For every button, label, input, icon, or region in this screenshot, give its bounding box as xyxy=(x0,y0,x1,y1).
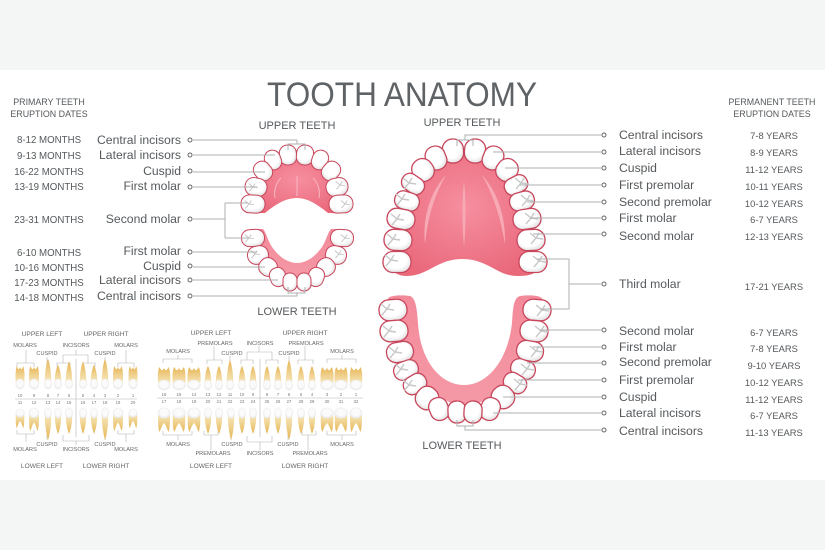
primary teeth chart: CUSPID xyxy=(36,442,58,448)
permanent teeth chart: CUSPID xyxy=(221,442,243,448)
permanent teeth chart: 17 xyxy=(162,399,167,404)
primary teeth chart: UPPER LEFT xyxy=(22,331,62,338)
permanent teeth eruption dates: PERMANENT TEETH xyxy=(729,97,815,107)
permanent teeth labels: Central incisors xyxy=(619,128,703,142)
primary arch leader lines xyxy=(188,138,305,298)
primary teeth chart: LOWER RIGHT xyxy=(83,463,129,470)
permanent teeth eruption dates: 10-11 YEARS xyxy=(745,181,803,192)
permanent teeth chart: MOLARS xyxy=(330,442,354,448)
permanent teeth chart: MOLARS xyxy=(166,442,190,448)
primary teeth eruption dates: 16-22 MONTHS xyxy=(14,167,84,178)
permanent teeth chart: 3 xyxy=(326,392,329,397)
permanent arch leader lines xyxy=(457,133,606,432)
primary teeth labels: Lateral incisors xyxy=(99,148,181,162)
primary teeth chart: 19 xyxy=(116,400,121,405)
permanent teeth labels: First premolar xyxy=(619,373,694,387)
permanent teeth chart: INCISORS xyxy=(246,451,274,457)
permanent teeth labels: Third molar xyxy=(619,277,681,291)
permanent teeth chart: 24 xyxy=(251,399,256,404)
primary teeth chart: MOLARS xyxy=(13,343,37,349)
permanent teeth eruption dates: 11-13 YEARS xyxy=(745,427,803,438)
large lower arch xyxy=(378,295,552,423)
permanent teeth eruption dates: 10-12 YEARS xyxy=(745,377,803,388)
primary teeth eruption dates: 14-18 MONTHS xyxy=(14,293,84,304)
permanent teeth chart: 6 xyxy=(288,392,291,397)
permanent teeth chart: 8 xyxy=(266,392,269,397)
permanent teeth labels: Second molar xyxy=(619,324,694,338)
primary teeth chart: 17 xyxy=(92,400,97,405)
permanent teeth chart: 11 xyxy=(228,392,233,397)
permanent teeth chart: 29 xyxy=(310,399,315,404)
permanent teeth eruption dates: 8-9 YEARS xyxy=(750,147,798,158)
permanent teeth chart: MOLARS xyxy=(330,349,354,355)
primary teeth chart: CUSPID xyxy=(94,351,116,357)
primary teeth eruption dates: 23-31 MONTHS xyxy=(14,215,84,226)
permanent teeth chart: PREMOLARS xyxy=(195,451,231,457)
heading: small upper teeth: UPPER TEETH xyxy=(259,120,335,132)
primary teeth chart: MOLARS xyxy=(114,343,138,349)
white panel xyxy=(0,70,825,480)
primary teeth chart: LOWER LEFT xyxy=(21,463,63,470)
title: TOOTH ANATOMY xyxy=(267,76,537,114)
primary teeth chart: 1 xyxy=(132,393,135,398)
permanent teeth labels: Lateral incisors xyxy=(619,406,701,420)
primary teeth chart: 10 xyxy=(18,393,23,398)
permanent teeth chart: CUSPID xyxy=(278,351,300,357)
permanent teeth eruption dates: 6-7 YEARS xyxy=(750,327,798,338)
primary teeth chart: 20 xyxy=(131,400,136,405)
primary teeth chart: 6 xyxy=(68,393,71,398)
permanent teeth labels: Cuspid xyxy=(619,390,657,404)
primary teeth chart: 7 xyxy=(57,393,60,398)
permanent teeth chart: 22 xyxy=(228,399,233,404)
primary teeth labels: Second molar xyxy=(106,212,181,226)
permanent teeth chart: INCISORS xyxy=(246,341,274,347)
primary teeth chart: 18 xyxy=(103,400,108,405)
permanent teeth eruption dates: 9-10 YEARS xyxy=(748,360,800,371)
primary teeth chart xyxy=(13,331,138,470)
permanent teeth chart: 16 xyxy=(162,392,167,397)
primary teeth eruption dates: 13-19 MONTHS xyxy=(14,182,84,193)
permanent teeth chart: 4 xyxy=(311,392,314,397)
permanent teeth chart: UPPER RIGHT xyxy=(282,330,328,337)
primary teeth chart: MOLARS xyxy=(13,447,37,453)
permanent teeth labels: First molar xyxy=(619,340,677,354)
primary teeth chart: 3 xyxy=(104,393,107,398)
permanent teeth eruption dates: 7-8 YEARS xyxy=(750,130,798,141)
primary teeth chart: 11 xyxy=(18,400,23,405)
permanent teeth chart: 25 xyxy=(265,399,270,404)
permanent teeth chart xyxy=(157,330,363,470)
primary teeth labels: First molar xyxy=(123,179,181,193)
primary teeth eruption dates: 17-23 MONTHS xyxy=(14,278,84,289)
primary teeth chart: INCISORS xyxy=(62,343,90,349)
heading: small lower teeth: LOWER TEETH xyxy=(257,306,337,318)
permanent teeth chart: MOLARS xyxy=(166,349,190,355)
permanent teeth chart: 2 xyxy=(340,392,343,397)
permanent teeth labels: Cuspid xyxy=(619,161,657,175)
permanent teeth labels: Second premolar xyxy=(619,195,712,209)
primary teeth labels: Cuspid xyxy=(143,164,181,178)
heading: large lower teeth: LOWER TEETH xyxy=(422,440,502,452)
permanent teeth eruption dates: 11-12 YEARS xyxy=(745,164,803,175)
permanent teeth eruption dates: 7-8 YEARS xyxy=(750,343,798,354)
permanent teeth chart: 12 xyxy=(217,392,222,397)
permanent teeth labels: First premolar xyxy=(619,178,694,192)
permanent teeth chart: 21 xyxy=(217,399,222,404)
permanent teeth chart: 31 xyxy=(339,399,344,404)
primary teeth labels: Cuspid xyxy=(143,259,181,273)
primary teeth labels: First molar xyxy=(123,244,181,258)
permanent teeth chart: PREMOLARS xyxy=(197,341,233,347)
permanent teeth chart: UPPER LEFT xyxy=(191,330,231,337)
primary teeth eruption dates: PRIMARY TEETH xyxy=(13,97,85,107)
permanent teeth chart: 20 xyxy=(206,399,211,404)
primary teeth chart: 9 xyxy=(33,393,36,398)
small upper arch xyxy=(241,144,353,214)
permanent teeth chart: PREMOLARS xyxy=(292,451,328,457)
permanent teeth eruption dates: 17-21 YEARS xyxy=(745,281,803,292)
primary teeth chart: 2 xyxy=(117,393,120,398)
permanent teeth labels: First molar xyxy=(619,211,677,225)
permanent teeth chart: 30 xyxy=(325,399,330,404)
permanent teeth labels: Second molar xyxy=(619,229,694,243)
small lower arch xyxy=(241,229,354,291)
permanent teeth chart: 27 xyxy=(287,399,292,404)
primary teeth eruption dates: 9-13 MONTHS xyxy=(17,151,82,162)
primary teeth eruption dates: ERUPTION DATES xyxy=(10,109,88,119)
permanent teeth chart: 26 xyxy=(276,399,281,404)
permanent teeth labels: Central incisors xyxy=(619,424,703,438)
permanent teeth eruption dates: 6-7 YEARS xyxy=(750,214,798,225)
permanent teeth eruption dates: ERUPTION DATES xyxy=(733,109,811,119)
primary teeth eruption dates xyxy=(10,97,88,304)
permanent teeth chart: PREMOLARS xyxy=(288,341,324,347)
permanent teeth chart: 9 xyxy=(252,392,255,397)
permanent teeth chart: CUSPID xyxy=(277,442,299,448)
primary teeth eruption dates: 6-10 MONTHS xyxy=(17,248,82,259)
permanent teeth eruption dates: 10-12 YEARS xyxy=(745,198,803,209)
permanent teeth chart: 23 xyxy=(240,399,245,404)
primary teeth labels: Lateral incisors xyxy=(99,273,181,287)
permanent teeth chart: LOWER LEFT xyxy=(190,463,232,470)
permanent teeth labels: Second premolar xyxy=(619,355,712,369)
permanent teeth chart: 13 xyxy=(206,392,211,397)
heading: large upper teeth: UPPER TEETH xyxy=(424,117,500,129)
permanent teeth labels: Lateral incisors xyxy=(619,144,701,158)
permanent teeth chart: 1 xyxy=(355,392,358,397)
permanent teeth chart: CUSPID xyxy=(221,351,243,357)
primary teeth chart: MOLARS xyxy=(114,447,138,453)
primary teeth chart: 8 xyxy=(47,393,50,398)
permanent teeth chart: 18 xyxy=(177,399,182,404)
permanent teeth eruption dates: 6-7 YEARS xyxy=(750,410,798,421)
primary teeth chart: 12 xyxy=(32,400,37,405)
primary teeth chart: 14 xyxy=(56,400,61,405)
permanent teeth eruption dates xyxy=(729,97,815,438)
permanent teeth chart: 28 xyxy=(299,399,304,404)
permanent teeth labels xyxy=(619,128,712,438)
primary teeth chart: CUSPID xyxy=(36,351,58,357)
primary teeth chart: CUSPID xyxy=(94,442,116,448)
primary teeth eruption dates: 10-16 MONTHS xyxy=(14,263,84,274)
primary teeth chart: 4 xyxy=(93,393,96,398)
large upper arch xyxy=(383,138,547,276)
permanent teeth chart: 10 xyxy=(240,392,245,397)
permanent teeth chart: 32 xyxy=(354,399,359,404)
primary teeth labels xyxy=(97,133,181,303)
permanent teeth chart: 15 xyxy=(177,392,182,397)
permanent teeth eruption dates: 12-13 YEARS xyxy=(745,231,803,242)
primary teeth eruption dates: 8-12 MONTHS xyxy=(17,135,82,146)
permanent teeth chart: LOWER RIGHT xyxy=(282,463,328,470)
permanent teeth chart: 14 xyxy=(192,392,197,397)
permanent teeth chart: 5 xyxy=(300,392,303,397)
primary teeth labels: Central incisors xyxy=(97,133,181,147)
primary teeth chart: 15 xyxy=(67,400,72,405)
primary teeth chart: 5 xyxy=(82,393,85,398)
primary teeth labels: Central incisors xyxy=(97,289,181,303)
primary teeth chart: 13 xyxy=(46,400,51,405)
primary teeth chart: 16 xyxy=(81,400,86,405)
permanent teeth eruption dates: 11-12 YEARS xyxy=(745,394,803,405)
permanent teeth chart: 7 xyxy=(277,392,280,397)
permanent teeth chart: 19 xyxy=(192,399,197,404)
primary teeth chart: UPPER RIGHT xyxy=(83,331,129,338)
primary teeth chart: INCISORS xyxy=(62,447,90,453)
